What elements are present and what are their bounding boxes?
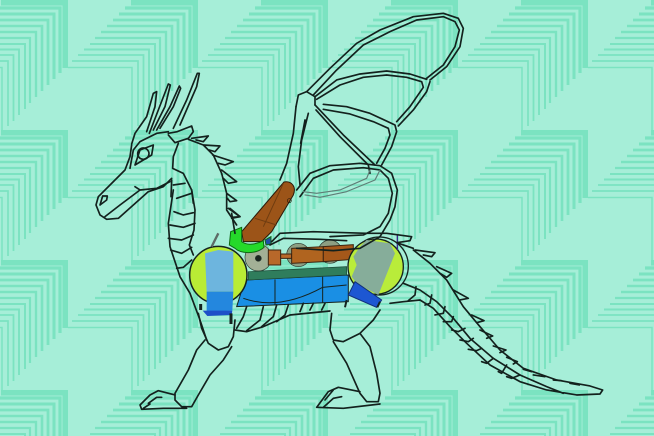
middle finger <box>315 71 430 126</box>
third finger <box>323 104 397 165</box>
tail outline <box>390 250 603 395</box>
lower neck and chest <box>168 190 207 340</box>
neck back and spikes <box>188 136 240 225</box>
head outline <box>96 145 172 219</box>
wing <box>280 13 463 251</box>
horizontal piston <box>268 245 353 265</box>
back foot <box>317 387 380 408</box>
mouth <box>105 182 170 217</box>
green bar <box>248 267 347 280</box>
dragon illustration <box>96 13 603 409</box>
ear <box>168 126 193 143</box>
nostril <box>100 196 107 205</box>
front leg <box>175 313 235 407</box>
eye <box>135 145 153 165</box>
neck and head <box>96 73 240 225</box>
tail spikes <box>415 250 579 385</box>
upper neck <box>171 143 193 203</box>
tail segments <box>408 287 520 378</box>
blue body tank <box>237 275 348 307</box>
wing arm <box>280 107 308 185</box>
mechanism: internal parts <box>229 182 353 307</box>
left joint sphere <box>190 233 247 324</box>
back leg <box>330 310 380 402</box>
legs and belly <box>140 303 380 409</box>
right joint sphere <box>345 235 408 307</box>
back line <box>230 208 413 248</box>
fourth finger <box>315 105 375 173</box>
belly and ribs <box>235 303 330 332</box>
brow <box>130 132 168 168</box>
wing shadow <box>303 170 380 197</box>
lower wing <box>297 163 397 251</box>
tail <box>390 250 603 395</box>
green bracket <box>229 227 271 253</box>
head crest <box>132 73 199 144</box>
top finger <box>307 13 463 95</box>
body top line <box>272 232 413 248</box>
brown arm <box>242 182 294 242</box>
wheels <box>245 240 342 271</box>
wing joint <box>296 92 315 107</box>
front foot <box>140 391 187 409</box>
